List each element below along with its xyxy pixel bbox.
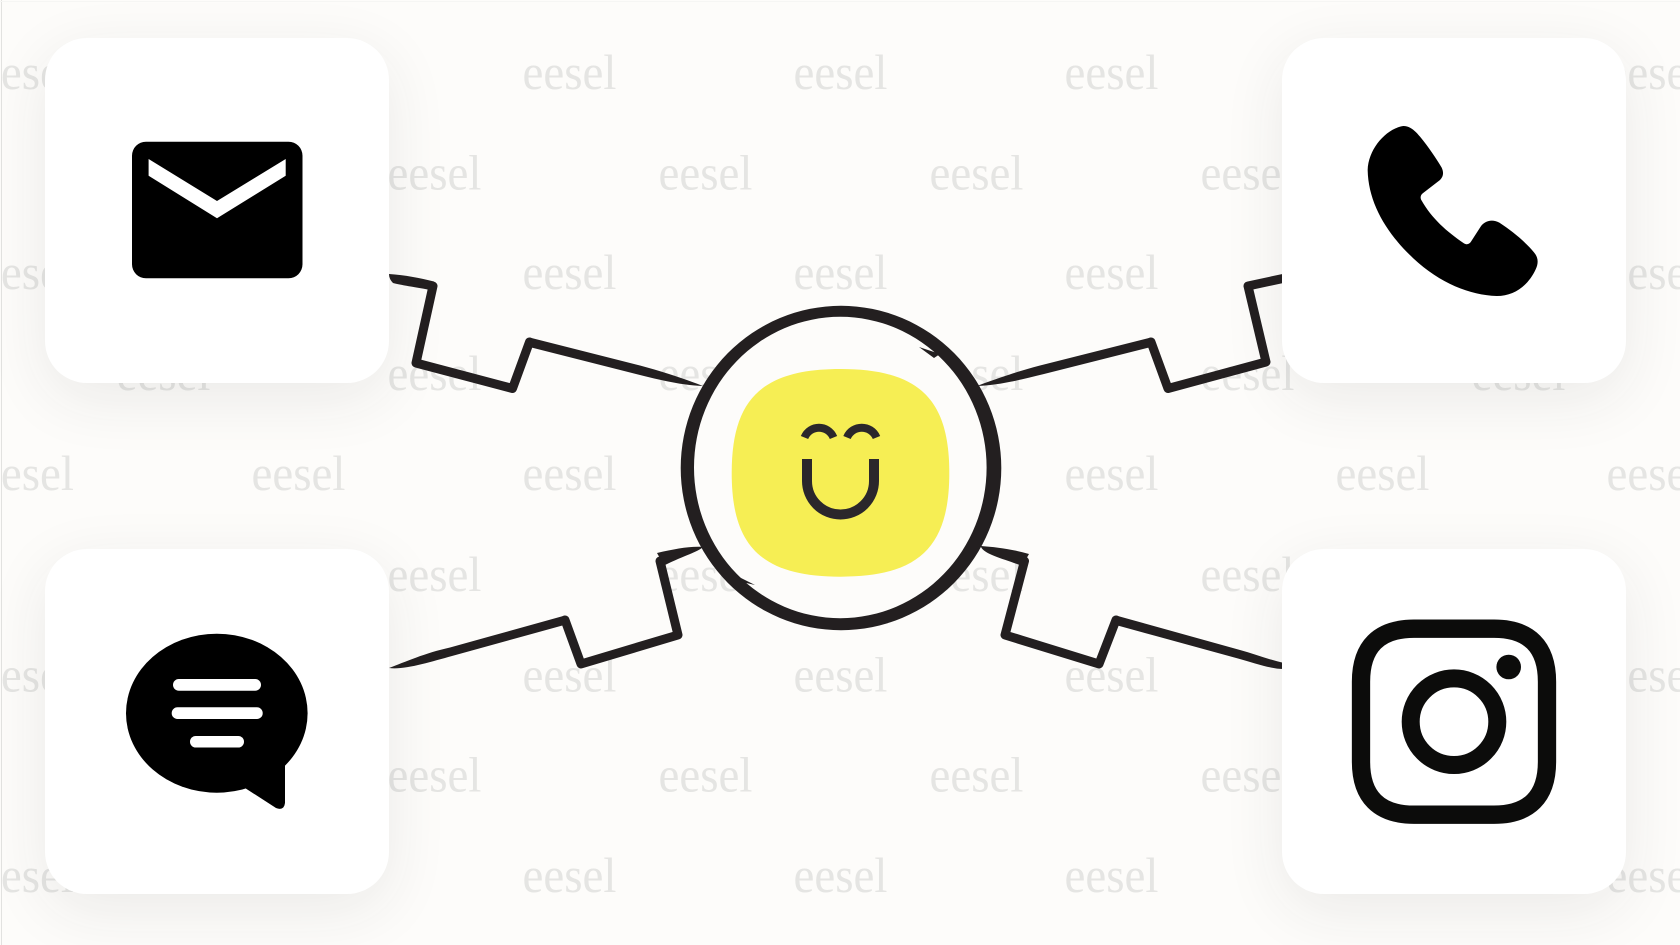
- watermark pattern: eesel: [1200, 746, 1294, 802]
- logo: yellow squircle: [732, 369, 949, 577]
- watermark pattern: eesel: [1336, 445, 1430, 501]
- watermark pattern: eesel: [930, 746, 1024, 802]
- watermark pattern: eesel: [522, 244, 616, 300]
- watermark pattern: eesel: [1064, 445, 1158, 501]
- watermark pattern: eesel: [1472, 345, 1566, 401]
- panel: instagram card: [1282, 549, 1626, 894]
- logo: smiling face: [804, 428, 876, 514]
- watermark pattern: eesel: [116, 345, 210, 401]
- watermark pattern: eesel: [522, 646, 616, 702]
- icon: speech bubble: [126, 634, 308, 809]
- watermark pattern: eesel: [658, 345, 752, 401]
- icon: instagram camera: [1352, 620, 1556, 824]
- arrow: instagram to centre: [981, 546, 1284, 669]
- arrow: email to centre: [389, 274, 703, 388]
- watermark pattern: eesel: [1064, 244, 1158, 300]
- watermark pattern: eesel: [794, 44, 888, 100]
- watermark pattern: eesel: [658, 746, 752, 802]
- watermark pattern: eesel: [522, 44, 616, 100]
- watermark pattern: eesel: [388, 546, 482, 602]
- watermark pattern: eesel: [388, 144, 482, 200]
- watermark pattern: eesel: [252, 445, 346, 501]
- centre circle: [681, 306, 1001, 630]
- icon: phone handset: [1368, 126, 1538, 296]
- watermark pattern: eesel: [522, 847, 616, 903]
- watermark pattern: eesel: [1064, 847, 1158, 903]
- watermark pattern: eesel: [1064, 44, 1158, 100]
- watermark pattern: eesel: [1064, 646, 1158, 702]
- watermark pattern: eesel: [930, 345, 1024, 401]
- watermark pattern: eesel: [930, 546, 1024, 602]
- arrow: chat to centre: [389, 547, 703, 668]
- panel: phone card: [1282, 38, 1626, 383]
- arrow: phone to centre: [977, 277, 1290, 388]
- watermark pattern: eesel: [1200, 345, 1294, 401]
- watermark pattern: eesel: [794, 244, 888, 300]
- watermark pattern: eesel: [794, 646, 888, 702]
- icon: envelope: [132, 142, 302, 278]
- watermark pattern: eesel: [1200, 546, 1294, 602]
- watermark pattern: eesel: [930, 144, 1024, 200]
- watermark pattern: eesel: [388, 746, 482, 802]
- panel: email card: [45, 38, 389, 383]
- watermark pattern: eesel: [1200, 144, 1294, 200]
- watermark pattern: eesel: [794, 847, 888, 903]
- watermark pattern: eesel: [388, 345, 482, 401]
- watermark pattern: eesel: [658, 144, 752, 200]
- watermark pattern: eesel: [522, 445, 616, 501]
- watermark pattern: eesel: [658, 546, 752, 602]
- panel: chat card: [45, 549, 389, 894]
